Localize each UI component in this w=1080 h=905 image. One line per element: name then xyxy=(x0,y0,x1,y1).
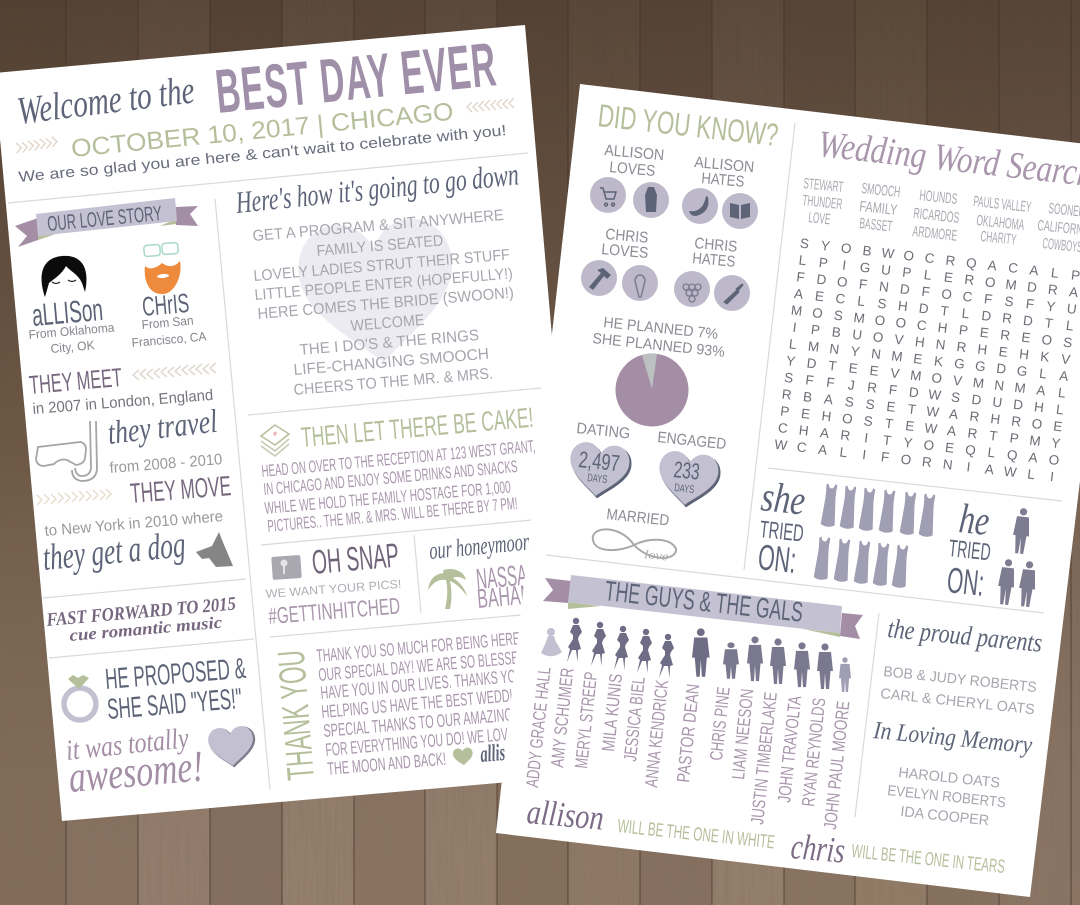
wedding party names: RYAN REYNOLDS xyxy=(798,697,829,807)
planning stats: HE PLANNED 7% xyxy=(603,314,719,343)
reception details: HEAD ON OVER TO THE RECEPTION AT 123 WEST GRANT, xyxy=(261,437,536,481)
he tried on: ON: xyxy=(945,559,986,604)
proposal text xyxy=(104,653,247,726)
it was totally awesome: it was totally xyxy=(64,722,190,767)
engaged heart: DAYS xyxy=(674,482,695,496)
word list: HOUNDS xyxy=(919,187,958,208)
banner: the guys and the gals: THE GUYS & THE GALS xyxy=(603,575,805,628)
word search grid: SFFJRFDWSDUDHL xyxy=(783,370,1065,418)
he tried on: TRIED xyxy=(947,535,992,566)
thank you note xyxy=(316,628,530,779)
allison: face and bio xyxy=(28,256,115,356)
wedding party names: JOHN TRAVOLTA xyxy=(774,695,805,803)
reception details: WHILE WE HOLD THE FAMILY HOSTAGE FOR 1,000 xyxy=(264,478,511,518)
story: they move: they get a dog xyxy=(41,524,187,579)
planning stats: SHE PLANNED 93% xyxy=(592,330,726,361)
order of ceremony: WELCOME xyxy=(350,312,425,335)
oh snap section: WE WANT YOUR PICS! xyxy=(265,577,402,601)
thank you note: OUR SPECIAL DAY! WE ARE SO BLESSED xyxy=(318,647,527,685)
chris loves: CHRIS xyxy=(605,226,649,247)
reception details xyxy=(261,437,536,536)
word search grid: YDTEEVMOVMNMAL xyxy=(785,353,1067,401)
in loving memory: HAROLD OATS xyxy=(898,765,1001,792)
allison: face and bio: City, OK xyxy=(50,338,96,356)
order of ceremony: GET A PROGRAM & SIT ANYWHERE xyxy=(252,207,504,245)
in loving memory: EVELYN ROBERTS xyxy=(887,783,1007,811)
order of ceremony: LITTLE PEOPLE ENTER (HOPEFULLY!) xyxy=(254,265,513,304)
chris loves: LOVES xyxy=(601,241,649,262)
chris caption xyxy=(789,826,1006,878)
chris: face and bio: CHrIS xyxy=(141,288,190,322)
story: they travel: they travel xyxy=(106,404,219,452)
oh snap section xyxy=(265,537,402,629)
story: they move xyxy=(37,470,232,579)
engaged heart xyxy=(655,429,727,511)
heading: then let there be cake: THEN LET THERE BE CAKE! xyxy=(300,402,535,453)
word list: THUNDER xyxy=(802,192,843,213)
wedding party names: AMY SCHUMER xyxy=(547,667,577,768)
word list: PAULS VALLEY xyxy=(973,193,1032,216)
the proud parents: BOB & JUDY ROBERTS xyxy=(883,664,1037,696)
chris: face and bio xyxy=(131,242,208,350)
she tried on: TRIED xyxy=(758,516,805,548)
allison: face and bio: aLLISon xyxy=(31,292,104,333)
pie chart xyxy=(616,354,688,426)
wedding party names: JOHN PAUL MOORE xyxy=(820,700,853,830)
icon: snorkel mask xyxy=(36,421,97,481)
order of ceremony: Here's how it's going to go down xyxy=(233,156,520,220)
word list: OKLAHOMA xyxy=(976,212,1025,234)
left sheet: welcome program xyxy=(0,25,590,821)
fast forward note xyxy=(45,593,237,645)
he tried on: he xyxy=(957,496,992,545)
heading: did you know: DID YOU KNOW? xyxy=(596,97,780,153)
oh snap section: OH SNAP xyxy=(310,537,400,582)
icon: dog xyxy=(196,532,233,567)
he tried on xyxy=(945,496,992,604)
honeymoon section: NASSAU, xyxy=(475,558,543,596)
dating heart xyxy=(566,420,633,502)
thank you note: HELPING US HAVE THE BEST WEDDING xyxy=(321,684,530,722)
word search grid xyxy=(774,235,1080,485)
allison hates: ALLISON xyxy=(694,154,755,176)
married infinity symbol: MARRIED xyxy=(606,506,670,530)
wedding party names: ANNA KENDRICK xyxy=(641,679,672,788)
order of ceremony: CHEERS TO THE MR. & MRS. xyxy=(293,365,494,399)
allison caption xyxy=(525,792,776,853)
reception details: PICTURES.. THE MR. & MRS. WILL BE THERE BY 7 PM! xyxy=(267,494,518,536)
planning stats xyxy=(592,314,726,361)
icon: lavender heart xyxy=(207,725,258,770)
chris hates xyxy=(674,235,750,311)
order of ceremony: HERE COMES THE BRIDE (SWOON!) xyxy=(257,285,514,323)
order of ceremony: LIFE-CHANGING SMOOCH xyxy=(293,346,490,379)
thank you vertical heading: THANK YOU xyxy=(271,649,323,782)
suits xyxy=(996,507,1038,607)
married infinity symbol xyxy=(593,506,676,564)
wedding party names: MILA KUNIS xyxy=(598,673,626,752)
allison hates xyxy=(682,154,758,229)
story: they move: to New York in 2010 where xyxy=(44,508,224,540)
chevrons: right of date xyxy=(467,98,514,112)
she tried on xyxy=(756,474,808,581)
word search grid: LPIGUPLEROMDRA xyxy=(798,252,1079,300)
icon: camera xyxy=(271,555,302,580)
the proud parents: the proud parents xyxy=(886,613,1044,658)
allison loves: LOVES xyxy=(609,159,656,180)
chris hates: HATES xyxy=(692,250,736,271)
wedding party names: JUSTIN TIMBERLAKE xyxy=(747,691,781,825)
story: they travel xyxy=(106,404,223,477)
chris hates: CHRIS xyxy=(694,235,738,256)
proposal text: SHE SAID "YES!" xyxy=(106,683,243,726)
story: they meet: in 2007 in London, England xyxy=(32,387,214,418)
in loving memory xyxy=(872,717,1034,829)
in loving memory: In Loving Memory xyxy=(872,717,1034,759)
wedding party names: MERYL STREEP xyxy=(571,671,601,769)
icon: ring xyxy=(64,675,96,720)
word list: BASSET xyxy=(859,215,893,235)
it was totally awesome: awesome! xyxy=(67,741,205,802)
fast forward note: FAST FORWARD TO 2015 xyxy=(45,593,237,631)
thank you note: THE MOON AND BACK! xyxy=(327,749,447,779)
wedding party silhouettes xyxy=(541,618,851,692)
chris caption: chris xyxy=(789,826,847,871)
wedding party names: CHRIS PINE xyxy=(706,686,734,761)
word search grid: CHARITYOEQLQAO xyxy=(777,420,1060,468)
order of ceremony: LOVELY LADIES STRUT THEIR STUFF xyxy=(253,247,510,285)
order of ceremony xyxy=(233,156,520,399)
dating heart: DATING xyxy=(576,420,631,443)
word list: STEWART xyxy=(803,175,844,196)
wedding party names: JESSICA BIEL xyxy=(620,676,649,762)
in loving memory: IDA COOPER xyxy=(900,804,990,829)
allison loves xyxy=(590,142,669,218)
wedding party names: ADDY GRACE HALL xyxy=(522,666,555,788)
banner: our love story xyxy=(15,198,198,247)
thank you note: SPECIAL THANKS TO OUR AMAZING xyxy=(323,705,514,741)
thank you note: HAVE YOU IN OUR LIVES. THANKS YOU xyxy=(320,665,525,703)
wedding party names: PASTOR DEAN xyxy=(673,683,703,783)
word list: FAMILY xyxy=(859,198,898,219)
allison hates: HATES xyxy=(701,170,745,191)
word search grid: FDOFNDFOCFSFYU xyxy=(796,269,1077,317)
chris: face and bio: Francisco, CA xyxy=(131,329,208,350)
honeymoon section xyxy=(428,528,556,614)
the proud parents xyxy=(880,613,1044,718)
allison: face and bio: From Oklahoma xyxy=(28,321,115,342)
word list: LOVE xyxy=(808,209,831,228)
icon: cake xyxy=(261,425,289,456)
chris loves xyxy=(581,226,658,301)
word search grid: SYOBWOCRQACALP xyxy=(799,236,1080,283)
word search grid: WCALIFORNIAWLI xyxy=(774,437,1055,484)
date and location: OCTOBER 10, 2017 | CHICAGO xyxy=(70,98,455,163)
the proud parents: CARL & CHERYL OATS xyxy=(880,686,1035,718)
allison caption: allison xyxy=(525,792,605,838)
word search grid: IPBUOVHNRHEHKV xyxy=(792,320,1071,367)
story: they move: THEY MOVE xyxy=(129,470,232,509)
proposal text: HE PROPOSED & xyxy=(104,653,247,696)
word list xyxy=(802,175,1080,256)
dresses xyxy=(813,483,937,588)
right sheet: activities and wedding party xyxy=(496,84,1080,897)
word search grid: MOSMOOCHPEREOS xyxy=(790,303,1073,350)
reception details: IN CHICAGO AND ENJOY SOME DRINKS AND SNACKS xyxy=(263,457,518,499)
engaged heart: ENGAGED xyxy=(657,429,727,453)
thank you note: THANK YOU SO MUCH FOR BEING HERE xyxy=(316,628,521,666)
dating heart: 2,497 xyxy=(577,446,621,476)
word list: ARDMORE xyxy=(912,223,958,245)
chris: face and bio: From San xyxy=(141,314,194,332)
she tried on: she xyxy=(759,474,808,525)
heading: best day ever: BEST DAY EVER xyxy=(213,30,500,127)
thank you note: FOR EVERYTHING YOU DO! WE LOVE xyxy=(325,724,516,760)
honeymoon section: BAHAMAS xyxy=(476,577,556,614)
order of ceremony: THE I DO'S & THE RINGS xyxy=(299,327,480,359)
word search grid: RBASSETWARHROE xyxy=(781,387,1063,434)
word search grid: AECLSHDTLDRDTL xyxy=(793,286,1075,334)
word search grid: LMNYNMEKGGDGLA xyxy=(788,336,1069,384)
allison caption: WILL BE THE ONE IN WHITE xyxy=(616,816,776,853)
chevrons: left of date xyxy=(16,136,58,153)
married infinity symbol: love xyxy=(644,547,670,564)
fast forward note: cue romantic music xyxy=(69,613,223,645)
allison loves: ALLISON xyxy=(604,142,665,164)
it was totally awesome xyxy=(64,722,205,802)
word list: SMOOCH xyxy=(861,180,901,201)
honeymoon section: our honeymoon xyxy=(428,528,532,565)
banner: the guys and the gals xyxy=(543,575,863,639)
oh snap section: #GETTINHITCHED xyxy=(267,592,401,629)
order of ceremony: FAMILY IS SEATED xyxy=(316,232,444,260)
word list: CHARITY xyxy=(980,228,1017,249)
engaged heart: 233 xyxy=(672,456,701,485)
story: they meet: THEY MEET xyxy=(28,362,123,400)
dating heart: DAYS xyxy=(587,472,608,486)
wedding party names xyxy=(522,666,853,830)
header: welcome to the: Welcome to the xyxy=(15,69,197,133)
banner: our love story: OUR LOVE STORY xyxy=(46,202,163,236)
wedding party names: LIAM NEESON xyxy=(728,688,757,780)
she tried on: ON: xyxy=(756,536,798,581)
word list: RICARDOS xyxy=(913,205,960,227)
welcome message: We are so glad you are here & can't wait to celebrate with you! xyxy=(18,122,507,186)
word search grid: PEHOSTEWARTPMY xyxy=(779,403,1061,451)
story: they travel: from 2008 - 2010 xyxy=(109,451,223,477)
thank you note: allison xyxy=(479,739,521,768)
story: they meet xyxy=(28,362,216,418)
